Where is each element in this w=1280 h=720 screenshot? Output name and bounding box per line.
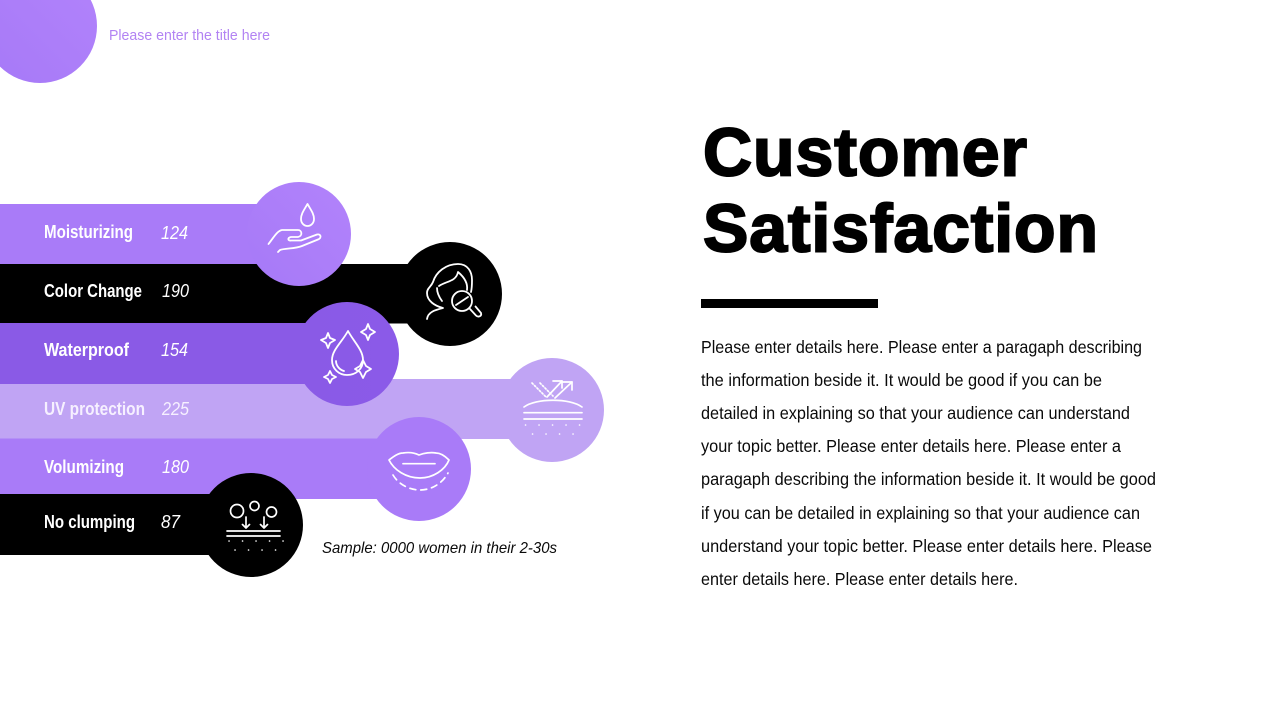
icon: particles on skin xyxy=(227,502,285,550)
sample note: Sample: 0000 women in their 2-30s xyxy=(322,540,557,557)
label: No clumping: No clumping xyxy=(44,512,135,532)
bar: Volumizing xyxy=(0,438,419,499)
main heading: Satisfaction xyxy=(703,190,1098,266)
bar: Moisturizing xyxy=(0,204,299,264)
label: Color Change: Color Change xyxy=(44,281,142,301)
body paragraph: understand your topic better. Please enter details here. Please xyxy=(701,536,1152,556)
label: Waterproof: Waterproof xyxy=(44,340,130,360)
icon: drop with sparkles xyxy=(321,324,375,383)
label: Volumizing: Volumizing xyxy=(44,457,124,477)
main heading xyxy=(703,114,1098,266)
circle: Moisturizing xyxy=(247,182,351,286)
body paragraph: your topic better. Please enter details here. Please enter a xyxy=(701,436,1121,456)
main heading: Customer xyxy=(703,114,1027,190)
row: Color Change xyxy=(0,242,502,346)
value: 190: 190 xyxy=(162,281,189,301)
body paragraph: the information beside it. It would be good if you can be xyxy=(701,370,1102,390)
value: 154: 154 xyxy=(161,340,188,360)
header circle xyxy=(0,0,97,83)
heading divider xyxy=(701,299,878,308)
body paragraph xyxy=(701,337,1156,589)
value: 225: 225 xyxy=(161,399,190,419)
icon: hand with drop xyxy=(268,204,321,252)
row: Moisturizing xyxy=(0,182,351,286)
label: UV protection: UV protection xyxy=(44,399,145,419)
bar: UV protection xyxy=(0,379,552,439)
value: 87: 87 xyxy=(161,512,181,532)
icon: lips xyxy=(389,453,449,490)
body paragraph: enter details here. Please enter details here. xyxy=(701,569,1018,589)
body paragraph: detailed in explaining so that your audience can understand xyxy=(701,403,1130,423)
value: 180: 180 xyxy=(162,457,189,477)
labels and values xyxy=(44,222,190,532)
value: 124: 124 xyxy=(161,223,188,243)
circle: Color Change xyxy=(398,242,502,346)
header title: Please enter the title here xyxy=(109,28,270,44)
bar: Color Change xyxy=(0,264,450,324)
bar: Waterproof xyxy=(0,323,347,384)
body paragraph: paragaph describing the information beside it. It would be good xyxy=(701,469,1156,489)
bar: No clumping xyxy=(0,494,251,555)
label: Moisturizing: Moisturizing xyxy=(44,222,133,242)
row: Volumizing xyxy=(0,417,471,521)
circle: Waterproof xyxy=(295,302,399,406)
body paragraph: if you can be detailed in explaining so that your audience can xyxy=(701,503,1140,523)
circle: No clumping xyxy=(199,473,303,577)
circle: UV protection xyxy=(500,358,604,462)
icon: face with magnifier xyxy=(427,264,481,319)
icon: UV reflecting off skin xyxy=(524,381,585,434)
body paragraph: Please enter details here. Please enter a paragaph describing xyxy=(701,337,1142,357)
row: No clumping xyxy=(0,473,303,577)
row: UV protection xyxy=(0,358,604,462)
row: Waterproof xyxy=(0,302,399,406)
circle: Volumizing xyxy=(367,417,471,521)
